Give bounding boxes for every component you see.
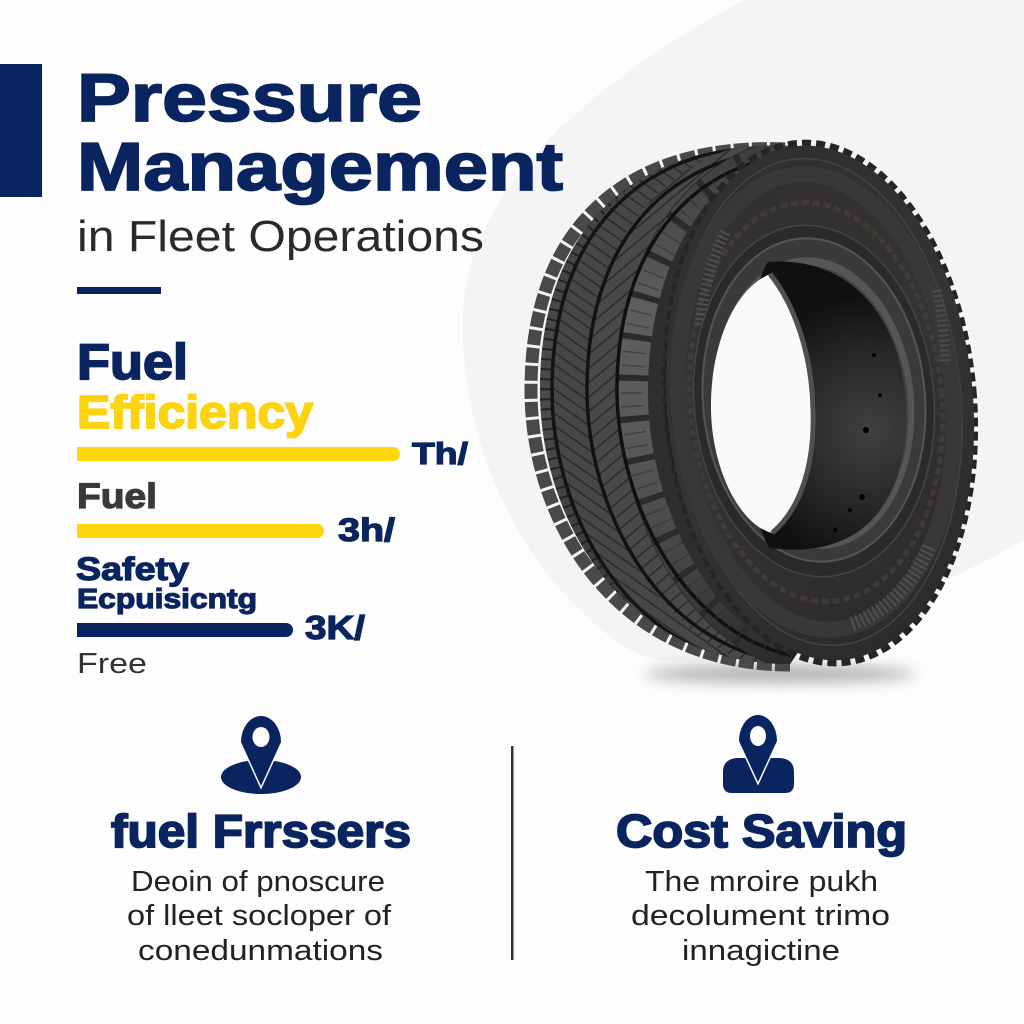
tire <box>530 130 995 683</box>
tire inner cavity <box>702 249 926 557</box>
body text right: The mroire pukh <box>645 866 878 898</box>
metric: safety: Safety <box>76 551 189 587</box>
tire hole <box>711 274 813 533</box>
background blob <box>463 0 1024 662</box>
metric: fuel: 3h/ <box>338 512 395 548</box>
title <box>77 60 563 205</box>
icon: map pin with oval base <box>221 716 301 794</box>
metric: safety: Free <box>77 648 147 680</box>
heading: cost saving: Cost Saving <box>616 805 907 857</box>
body text left: conedunmations <box>138 935 383 967</box>
title rule <box>77 287 161 294</box>
metric: fuel: Fuel <box>77 477 157 516</box>
tire tread body <box>540 146 798 664</box>
tire tread lugs <box>531 149 790 665</box>
title: Management <box>77 129 563 205</box>
metric: fuel efficiency: Fuel <box>77 334 188 390</box>
divider <box>511 746 514 960</box>
subtitle: in Fleet Operations <box>77 212 484 261</box>
icon: map pin with shoulders <box>723 715 794 793</box>
tire sidewall <box>645 131 995 675</box>
metric: safety: Ecpuisicntg <box>77 583 257 614</box>
body text right: innagictine <box>682 935 840 967</box>
metric: fuel efficiency: Efficiency <box>77 386 313 438</box>
body text left: Deoin of pnoscure <box>131 866 385 898</box>
heading: fuel frrssers: fuel Frrssers <box>111 805 411 857</box>
body text left <box>127 866 392 967</box>
metric: fuel efficiency: Th/ <box>412 436 468 471</box>
body text right: decolument trimo <box>631 900 890 932</box>
metric: fuel efficiency <box>77 334 468 471</box>
left accent bar <box>0 64 42 197</box>
tire shadow <box>645 665 915 683</box>
body text right <box>631 866 890 967</box>
tire hole rim edge <box>770 274 813 533</box>
body text left: of lleet socloper of <box>127 900 392 932</box>
metric: fuel <box>77 477 395 548</box>
title: Pressure <box>77 60 422 136</box>
metric: safety: 3K/ <box>305 609 365 646</box>
metric: safety <box>76 551 365 680</box>
